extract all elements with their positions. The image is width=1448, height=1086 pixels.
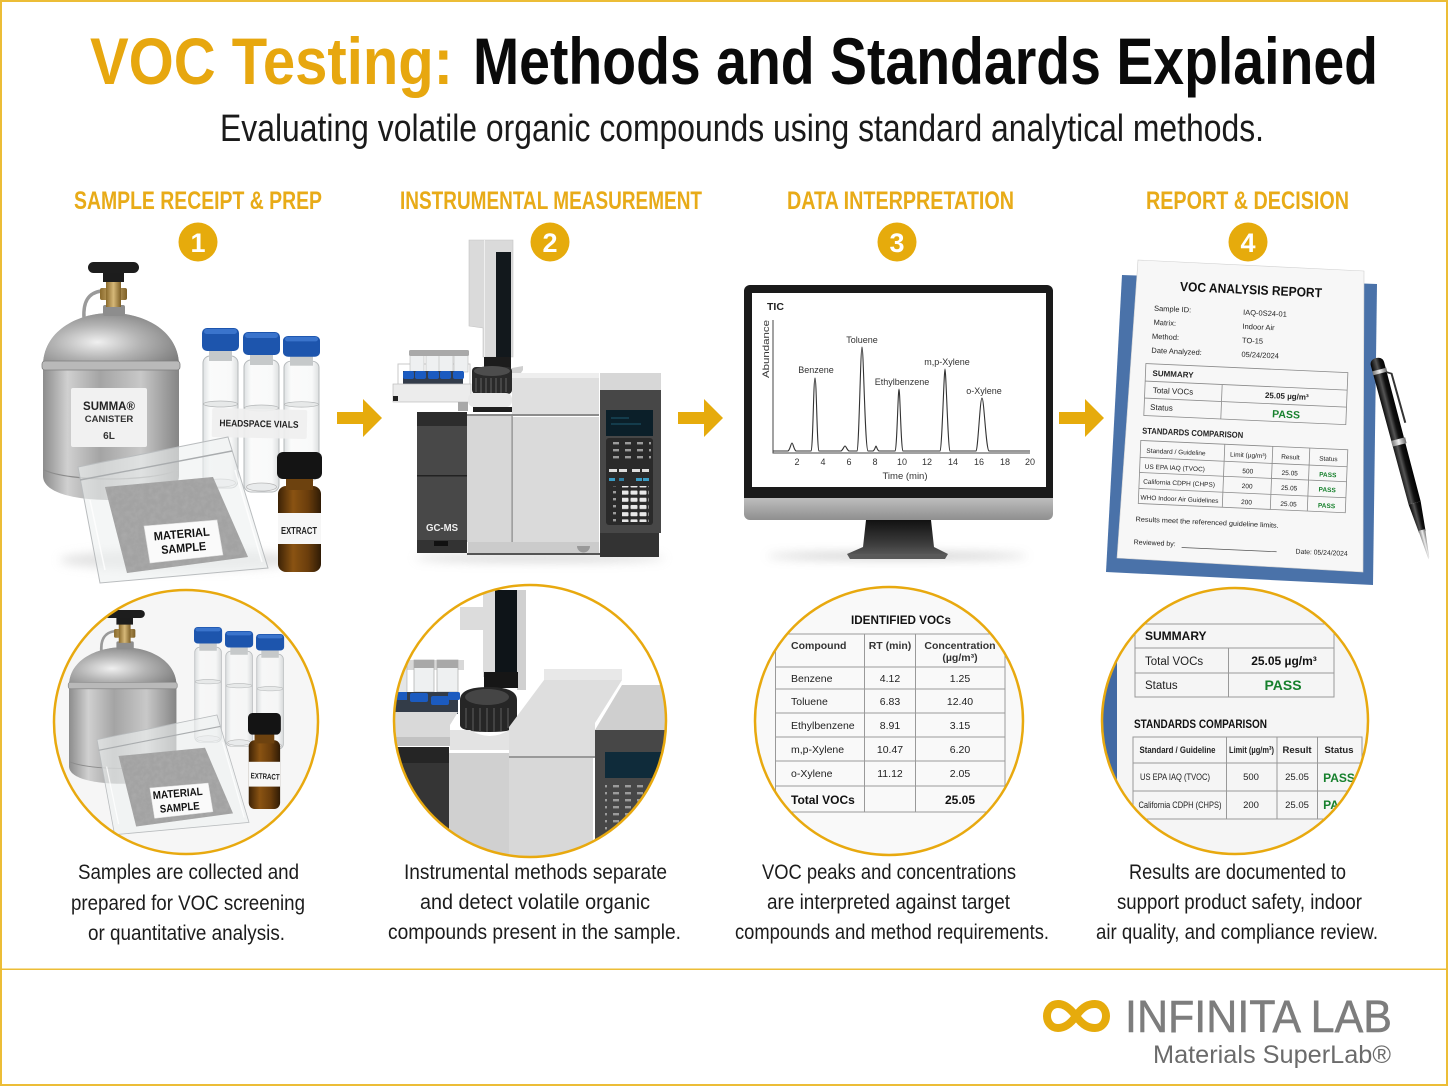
report text and tables: 25.05 µg/m³ <box>1265 391 1309 402</box>
chromatogram <box>761 301 1035 482</box>
caption step 3 <box>735 861 1049 944</box>
chromatogram: 10 <box>897 457 907 467</box>
arrow 3 <box>1059 399 1104 437</box>
subtitle: Evaluating volatile organic compounds using standard analytical methods. <box>220 108 1264 150</box>
chromatogram: 6 <box>846 457 852 467</box>
title: VOC Testing: <box>90 24 453 98</box>
report text and tables: PASS <box>1272 408 1300 422</box>
detail circle 4: summary and standards: Status <box>1145 680 1178 692</box>
detail circle 3: identified VOCs table <box>750 585 1030 860</box>
illustration: GC-MS instrument <box>393 240 665 562</box>
detail circle 3: identified VOCs table: Compound <box>791 640 846 652</box>
detail circle 4: summary and standards: Standard / Guideline <box>1140 745 1216 756</box>
detail circle 3: identified VOCs table: 2.05 <box>950 768 970 780</box>
arrow 2 <box>678 399 723 437</box>
chromatogram: Ethylbenzene <box>875 377 929 387</box>
monitor body <box>744 285 1053 520</box>
heading: step 2: INSTRUMENTAL MEASUREMENT <box>400 187 702 215</box>
detail circle 3: identified VOCs table: 6.83 <box>880 696 900 708</box>
illustration: sample containers <box>42 262 322 583</box>
report text and tables: Status <box>1319 456 1338 463</box>
heading: step 1: SAMPLE RECEIPT & PREP <box>74 187 322 215</box>
chromatogram: 20 <box>1025 457 1035 467</box>
report text and tables: WHO Indoor Air Guidelines <box>1140 495 1219 505</box>
detail circle 3: identified VOCs table: Benzene <box>791 673 833 685</box>
arrow 1 <box>337 399 382 437</box>
report text and tables: 25.05 <box>1281 485 1298 493</box>
detail circle 3: identified VOCs table: IDENTIFIED VOCs <box>851 613 951 627</box>
icon: headspace vials: HEADSPACE VIALS <box>219 418 299 431</box>
illustration: report on blue folder <box>1106 260 1439 585</box>
badge 4: 4 <box>1240 228 1256 258</box>
report text and tables: Reviewed by: <box>1134 539 1176 548</box>
detail circle 4: summary and standards: Status <box>1324 745 1354 756</box>
step number badges <box>178 222 1268 262</box>
report text and tables: 25.05 <box>1280 501 1297 509</box>
logo: Infinita Lab <box>1047 991 1392 1069</box>
caption step 3: compounds and method requirements. <box>735 921 1049 944</box>
report text and tables: 200 <box>1242 483 1253 491</box>
chromatogram: 8 <box>872 457 878 467</box>
report text and tables: VOC ANALYSIS REPORT <box>1180 279 1322 300</box>
caption step 2: compounds present in the sample. <box>388 921 681 944</box>
report text and tables: Limit (µg/m³) <box>1230 451 1267 460</box>
detail circle 4: summary and standards: California CDPH (CHPS) <box>1138 800 1222 811</box>
icon: extract bottle: EXTRACT <box>281 526 317 537</box>
report text and tables: California CDPH (CHPS) <box>1143 479 1215 489</box>
icon: infinity mark <box>1047 1004 1106 1028</box>
title <box>90 24 1378 98</box>
chromatogram: Time (min) <box>882 471 928 482</box>
detail circle 4: summary and standards: Limit (µg/m³) <box>1229 745 1274 756</box>
detail circle 3: identified VOCs table: m,p-Xylene <box>791 744 844 756</box>
caption step 2: Instrumental methods separate <box>404 861 667 884</box>
caption step 1: Samples are collected and <box>78 861 299 884</box>
report text and tables: Total VOCs <box>1153 386 1193 397</box>
report text and tables: STANDARDS COMPARISON <box>1142 426 1243 440</box>
report text and tables: 200 <box>1241 499 1252 507</box>
report text and tables: 500 <box>1242 468 1254 476</box>
report text and tables: PASS <box>1319 472 1337 479</box>
detail circle 3: identified VOCs table: 11.12 <box>877 768 903 780</box>
report text and tables: Date: 05/24/2024 <box>1295 549 1348 558</box>
detail circle 4: summary and standards: PASS <box>1323 798 1355 812</box>
caption step 4: support product safety, indoor <box>1117 891 1362 914</box>
chromatogram: 12 <box>922 457 932 467</box>
report text and tables: Method: <box>1152 332 1179 342</box>
chromatogram: 16 <box>974 457 984 467</box>
caption step 1: prepared for VOC screening <box>71 892 305 915</box>
illustration: monitor with chromatogram <box>744 285 1053 559</box>
badge 1: 1 <box>190 228 206 258</box>
detail circle 3: identified VOCs table: 1.25 <box>950 673 970 685</box>
report text and tables: US EPA IAQ (TVOC) <box>1145 464 1205 473</box>
badge 1 <box>178 222 218 262</box>
chromatogram: Benzene <box>798 365 834 375</box>
left dark housing <box>417 412 467 553</box>
detail circle 3: identified VOCs table: Total VOCs <box>791 793 855 807</box>
caption step 3: are interpreted against target <box>767 891 1010 914</box>
chromatogram: m,p-Xylene <box>924 357 970 367</box>
detail circle 3: identified VOCs table: RT (min) <box>869 640 911 652</box>
detail circle 3: identified VOCs table: 12.40 <box>947 696 973 708</box>
detail circle 3: identified VOCs table: Ethylbenzene <box>791 720 855 732</box>
control tower with display and keypad <box>600 373 661 557</box>
detail circle 4: summary and standards: 200 <box>1243 800 1259 811</box>
detail circle 3: identified VOCs table: o-Xylene <box>791 768 833 780</box>
detail circle 4: summary and standards: 25.05 <box>1285 800 1309 811</box>
detail circle 3: identified VOCs table: Concentration <box>924 640 996 652</box>
badge 3: 3 <box>889 228 905 258</box>
detail circle 2: instrument close-up <box>390 585 670 860</box>
caption step 4 <box>1096 861 1378 944</box>
monitor stand <box>847 520 948 559</box>
icon: headspace vials <box>202 328 320 492</box>
autosampler tower <box>469 240 513 369</box>
chromatogram: 2 <box>794 457 800 467</box>
report text and tables: Standard / Guideline <box>1146 448 1206 457</box>
report text and tables: IAQ-0S24-01 <box>1243 308 1287 319</box>
badge 2: 2 <box>542 228 558 258</box>
report text and tables: Date Analyzed: <box>1151 346 1202 357</box>
caption step 1 <box>71 861 305 945</box>
report text and tables: PASS <box>1318 503 1336 510</box>
chromatogram: 14 <box>948 457 958 467</box>
chromatogram: 18 <box>1000 457 1010 467</box>
detail circle 4: summary and standards: US EPA IAQ (TVOC) <box>1140 772 1210 783</box>
icon: summa canister: 6L <box>103 431 115 442</box>
detail circle 3: identified VOCs table: 6.20 <box>950 744 970 756</box>
left dark housing: GC-MS <box>426 522 458 534</box>
icon: material sample bag: SAMPLE <box>161 539 207 557</box>
report text and tables <box>1133 277 1358 558</box>
logo tagline: Materials SuperLab® <box>1153 1041 1392 1069</box>
report paper <box>1117 260 1364 572</box>
detail circle 4: summary and standards: Total VOCs <box>1145 656 1203 668</box>
caption step 4: air quality, and compliance review. <box>1096 921 1378 944</box>
icon: pen <box>1369 355 1439 561</box>
chromatogram: 4 <box>820 457 826 467</box>
detail circle 3: identified VOCs table: (µg/m³) <box>942 652 978 664</box>
chromatogram: TIC <box>767 301 784 313</box>
report text and tables: 05/24/2024 <box>1241 350 1279 361</box>
icon: material sample bag <box>78 437 268 583</box>
detail circle 4: summary and standards: PASS <box>1264 677 1302 693</box>
caption step 2: and detect volatile organic <box>420 891 650 914</box>
detail circle 4: summary and standards: SUMMARY <box>1145 629 1207 643</box>
blue folder <box>1106 275 1377 585</box>
turret <box>468 366 512 412</box>
detail circle 3: identified VOCs table: 4.12 <box>880 673 900 685</box>
centre panels <box>467 373 600 555</box>
footer divider <box>2 968 1446 970</box>
detail circle 4: summary and standards: PASS <box>1323 771 1355 785</box>
detail circle 3: identified VOCs table: 3.15 <box>950 720 970 732</box>
report text and tables: Status <box>1150 403 1173 413</box>
icon: material sample bag: MATERIAL <box>153 525 210 543</box>
caption step 4: Results are documented to <box>1129 861 1346 884</box>
icon: summa canister <box>42 262 180 500</box>
detail circle 3: identified VOCs table: 8.91 <box>880 720 900 732</box>
step headings <box>74 187 1349 215</box>
detail circle 4: summary and standards: 500 <box>1243 772 1259 783</box>
detail circle 4: summary and standards: STANDARDS COMPARISON <box>1134 719 1267 731</box>
badge 3 <box>878 222 916 262</box>
report text and tables: Indoor Air <box>1242 322 1275 332</box>
detail circle 3: identified VOCs table: 25.05 <box>945 793 975 807</box>
detail circle 1: sample containers: EXTRACT <box>250 771 280 782</box>
icon: summa canister: SUMMA® <box>83 401 135 413</box>
badge 4 <box>1228 222 1268 262</box>
caption step 1: or quantitative analysis. <box>88 922 285 945</box>
icon: summa canister: CANISTER <box>85 414 133 425</box>
icon: extract bottle <box>277 452 322 572</box>
chromatogram: Toluene <box>846 335 878 345</box>
chromatogram: o-Xylene <box>966 386 1002 396</box>
detail circle 4: summary and standards: 25.05 <box>1285 772 1309 783</box>
logo wordmark: INFINITA LAB <box>1125 991 1392 1042</box>
report text and tables: Matrix: <box>1153 318 1176 328</box>
detail circle 3: identified VOCs table: 10.47 <box>877 744 903 756</box>
captions <box>71 861 1378 945</box>
badge 2 <box>530 222 570 262</box>
report text and tables: Sample ID: <box>1154 304 1191 314</box>
detail circle 3: identified VOCs table: Toluene <box>791 696 828 708</box>
heading: step 3: DATA INTERPRETATION <box>787 187 1014 215</box>
autosampler tray with vials <box>393 350 523 411</box>
caption step 3: VOC peaks and concentrations <box>762 861 1016 884</box>
report text and tables: Result <box>1281 454 1300 462</box>
report text and tables: TO-15 <box>1242 336 1263 346</box>
detail circle 1: sample containers: SAMPLE <box>159 800 200 816</box>
report text and tables: 25.05 <box>1281 470 1298 478</box>
chromatogram: Abundance <box>761 320 771 378</box>
detail circle 1: sample containers <box>50 585 325 860</box>
heading: step 4: REPORT & DECISION <box>1146 187 1349 215</box>
detail circle 4: summary and standards: 25.05 µg/m³ <box>1251 654 1317 668</box>
detail circle 4: summary and standards: Result <box>1282 745 1312 756</box>
detail circle 4: summary and standards <box>1098 585 1370 860</box>
caption step 2 <box>388 861 681 944</box>
report text and tables: PASS <box>1318 487 1337 494</box>
report text and tables: Results meet the referenced guideline limits. <box>1135 516 1279 530</box>
report text and tables: SUMMARY <box>1152 369 1194 380</box>
detail circle 1: sample containers: MATERIAL <box>152 786 203 802</box>
